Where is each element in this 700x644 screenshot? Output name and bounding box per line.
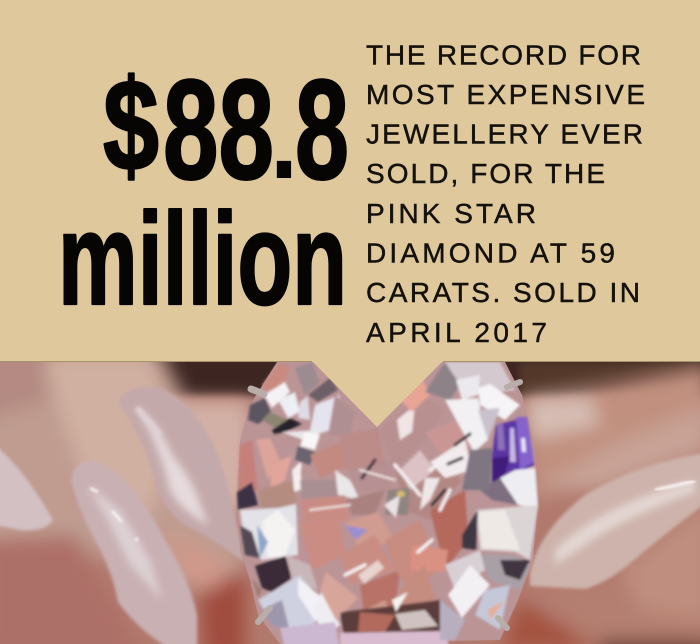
nail: far left	[0, 445, 53, 530]
right white blocks	[500, 468, 538, 508]
centre pink	[300, 495, 350, 525]
icon: right hand fingers and nails	[500, 365, 700, 644]
centre dark and bright streaks	[296, 434, 470, 575]
text block: record description: DIAMOND AT 59	[366, 238, 615, 268]
heading: price: $	[103, 52, 159, 198]
purple facet	[492, 417, 534, 485]
icon: pink diamond	[237, 362, 538, 644]
text block: record description: CARATS. SOLD IN	[366, 277, 640, 308]
diamond facets	[237, 362, 538, 644]
upper left	[262, 364, 290, 392]
nail: upper left	[118, 387, 244, 562]
text block: record description: APRIL 2017	[366, 317, 547, 348]
heading: million: million	[58, 185, 347, 332]
diamond prongs	[251, 382, 520, 628]
right side silver	[443, 362, 515, 395]
heading: price: 88	[163, 50, 274, 210]
diamond outline	[237, 362, 538, 644]
dark background behind fingers	[151, 362, 700, 401]
text block: record description	[366, 40, 645, 348]
photo: fingers holding the Pink Star diamond	[0, 345, 700, 644]
text block: record description: MOST EXPENSIVE	[366, 79, 645, 110]
heading: price	[103, 50, 349, 210]
nail: centre left	[71, 461, 197, 644]
icon: left hand fingers and nails	[0, 345, 250, 644]
text block: record description: JEWELLERY EVER	[366, 118, 643, 150]
lower left white block	[240, 504, 298, 560]
text block: record description: THE RECORD FOR	[366, 40, 641, 70]
text block: record description: PINK STAR	[366, 198, 536, 229]
nail: lower right	[530, 452, 700, 589]
panel: cream banner with pointer	[0, 0, 700, 427]
left edge	[238, 440, 258, 495]
heading: price: .	[270, 75, 298, 203]
text block: record description: SOLD, FOR THE	[366, 158, 605, 189]
heading: price: 8	[295, 50, 349, 210]
